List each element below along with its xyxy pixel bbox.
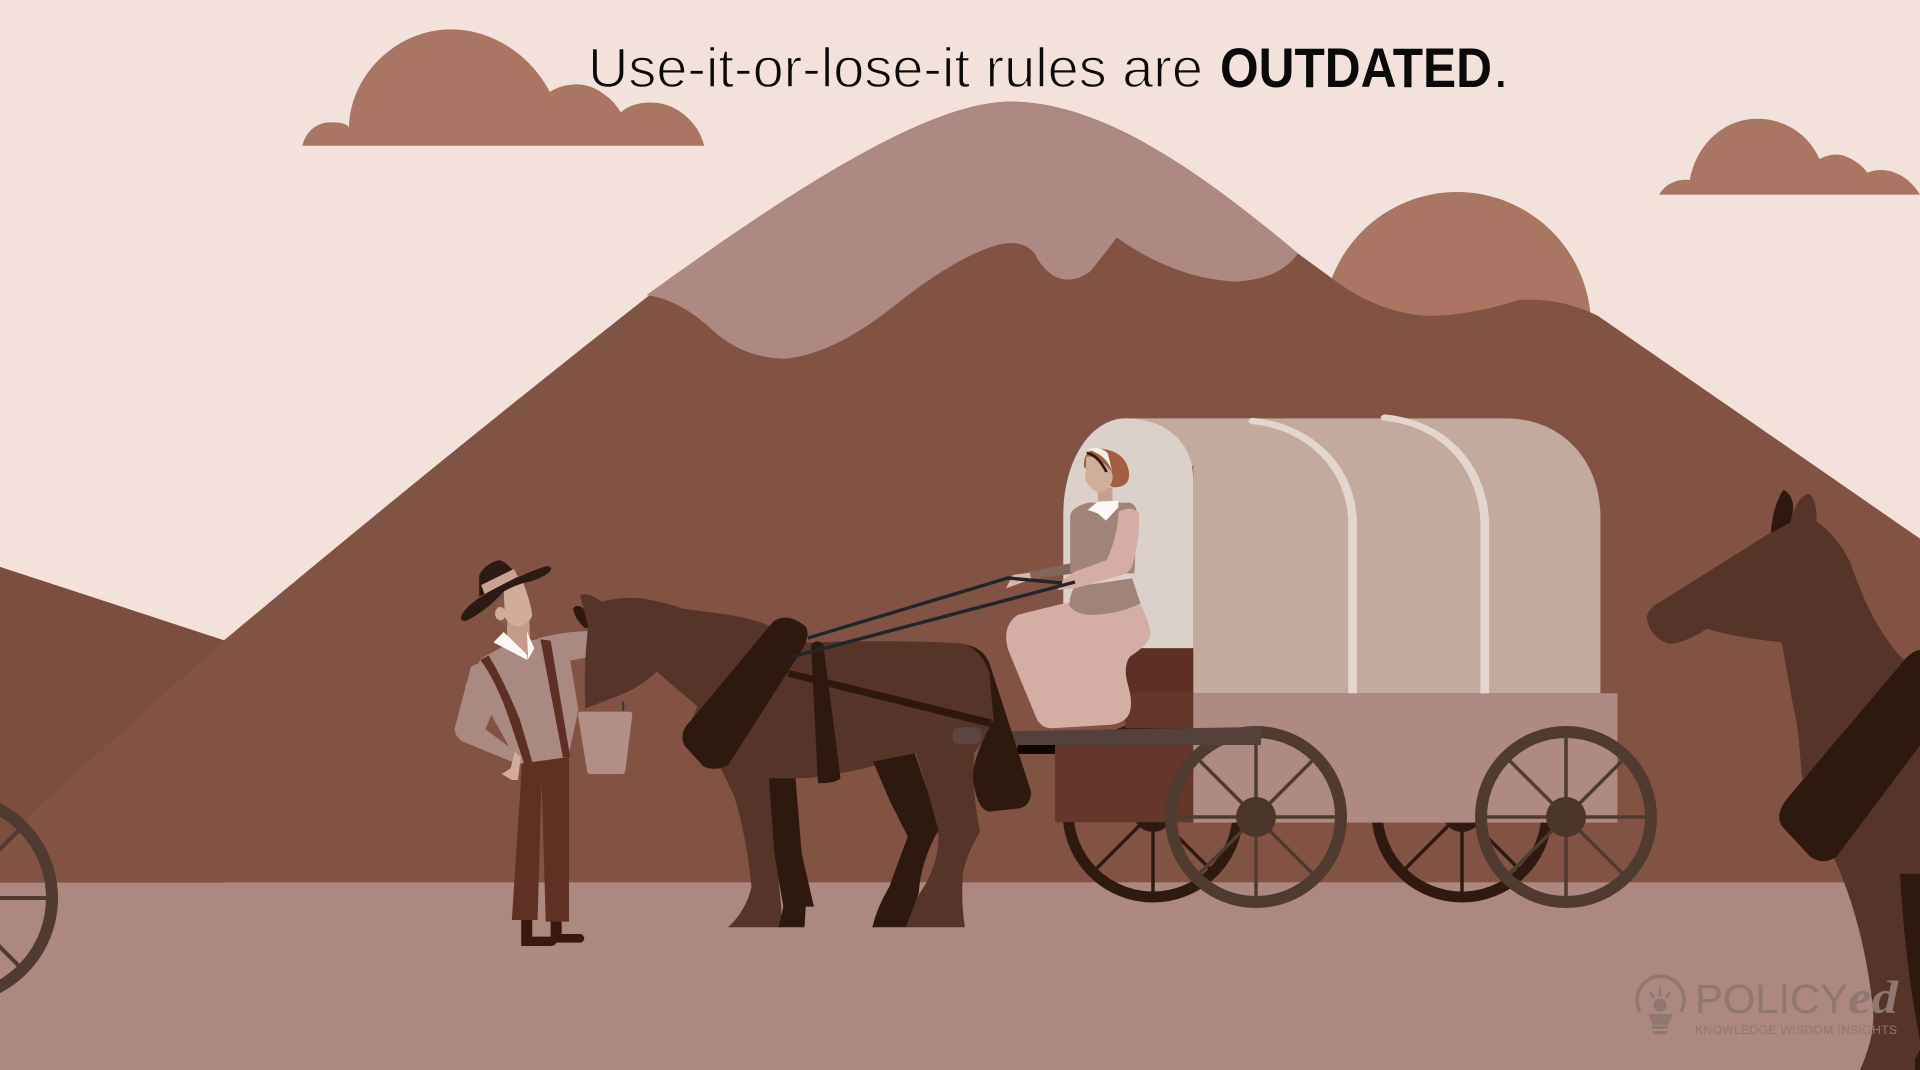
horse far ear xyxy=(573,606,591,628)
girth strap xyxy=(787,670,991,727)
sweater xyxy=(465,638,569,764)
near arm xyxy=(1057,509,1139,590)
left edge wagon wheel xyxy=(0,797,52,999)
man with hat xyxy=(455,560,587,946)
near sleeve xyxy=(455,663,522,764)
rear far wheel xyxy=(1377,727,1547,897)
front near wheel xyxy=(1171,732,1341,902)
water bucket handle xyxy=(621,702,626,711)
hat crown xyxy=(479,560,518,597)
hat band xyxy=(481,569,518,594)
canopy opening xyxy=(1063,418,1193,648)
peplum xyxy=(1069,578,1140,615)
right cloud xyxy=(1659,119,1920,195)
horse head, neck and body xyxy=(1647,494,1920,1070)
title: . xyxy=(1493,36,1509,99)
reins xyxy=(791,578,1075,657)
foreground horse at right edge xyxy=(1647,490,1920,1070)
wagon body xyxy=(1193,693,1617,823)
face xyxy=(1085,457,1113,492)
logo wordmark suffix: ed xyxy=(1848,972,1900,1024)
icon: lightbulb xyxy=(1637,976,1684,1034)
hair xyxy=(1084,448,1129,487)
headband xyxy=(1087,448,1112,473)
canopy rib 1 xyxy=(1253,421,1353,693)
front box xyxy=(1055,745,1193,822)
trousers xyxy=(512,757,569,922)
seat box xyxy=(1125,648,1193,693)
collar xyxy=(1088,501,1118,521)
front far wheel xyxy=(1068,727,1238,897)
far ear xyxy=(1771,490,1793,533)
logo wordmark: POLICY xyxy=(1695,976,1848,1022)
bodice xyxy=(1070,503,1137,573)
horse body and near legs xyxy=(580,594,996,927)
draft horse xyxy=(573,594,1031,927)
bar shadow xyxy=(1017,745,1055,754)
neck xyxy=(507,617,530,657)
hat brim xyxy=(461,566,551,621)
title xyxy=(588,36,1509,99)
title: OUTDATED xyxy=(1220,36,1492,99)
horse far hind leg xyxy=(872,753,938,927)
POLICYed logo xyxy=(1637,972,1900,1037)
left suspender xyxy=(480,655,533,763)
seat box lower xyxy=(1125,693,1193,728)
canopy rib 2 xyxy=(1385,418,1485,693)
hind breech strap xyxy=(967,645,1031,812)
neck xyxy=(1098,487,1112,504)
shaft end xyxy=(953,727,981,744)
right suspender xyxy=(540,639,570,757)
ground xyxy=(0,883,1920,1070)
title: Use-it-or-lose-it rules are xyxy=(588,36,1203,99)
far hand xyxy=(1006,573,1031,588)
canopy xyxy=(1125,418,1600,693)
horse far front leg xyxy=(769,778,814,927)
snow cap xyxy=(647,102,1298,359)
dark leg xyxy=(1900,874,1920,1040)
face xyxy=(504,580,532,627)
far arm xyxy=(538,631,587,753)
wagon xyxy=(1017,418,1617,823)
shoes xyxy=(521,918,584,946)
sun xyxy=(1323,192,1591,460)
neck collar xyxy=(682,618,808,769)
left cloud xyxy=(302,29,704,146)
woman driver xyxy=(1006,448,1151,728)
main mountain xyxy=(0,102,1920,883)
foot board bar xyxy=(955,727,1261,745)
hair and ear xyxy=(495,597,508,625)
arm gap xyxy=(485,715,509,747)
logo tagline: KNOWLEDGE WISDOM INSIGHTS xyxy=(1695,1023,1897,1037)
collar xyxy=(1779,650,1920,861)
hand xyxy=(502,752,521,780)
far sleeve xyxy=(1029,563,1075,579)
headband stripe xyxy=(1087,452,1108,472)
dress skirt xyxy=(1006,602,1151,728)
back left mountain xyxy=(0,567,224,883)
white collar xyxy=(493,632,534,660)
water bucket xyxy=(578,712,632,774)
belly strap xyxy=(811,641,840,783)
rear near wheel xyxy=(1481,732,1651,902)
